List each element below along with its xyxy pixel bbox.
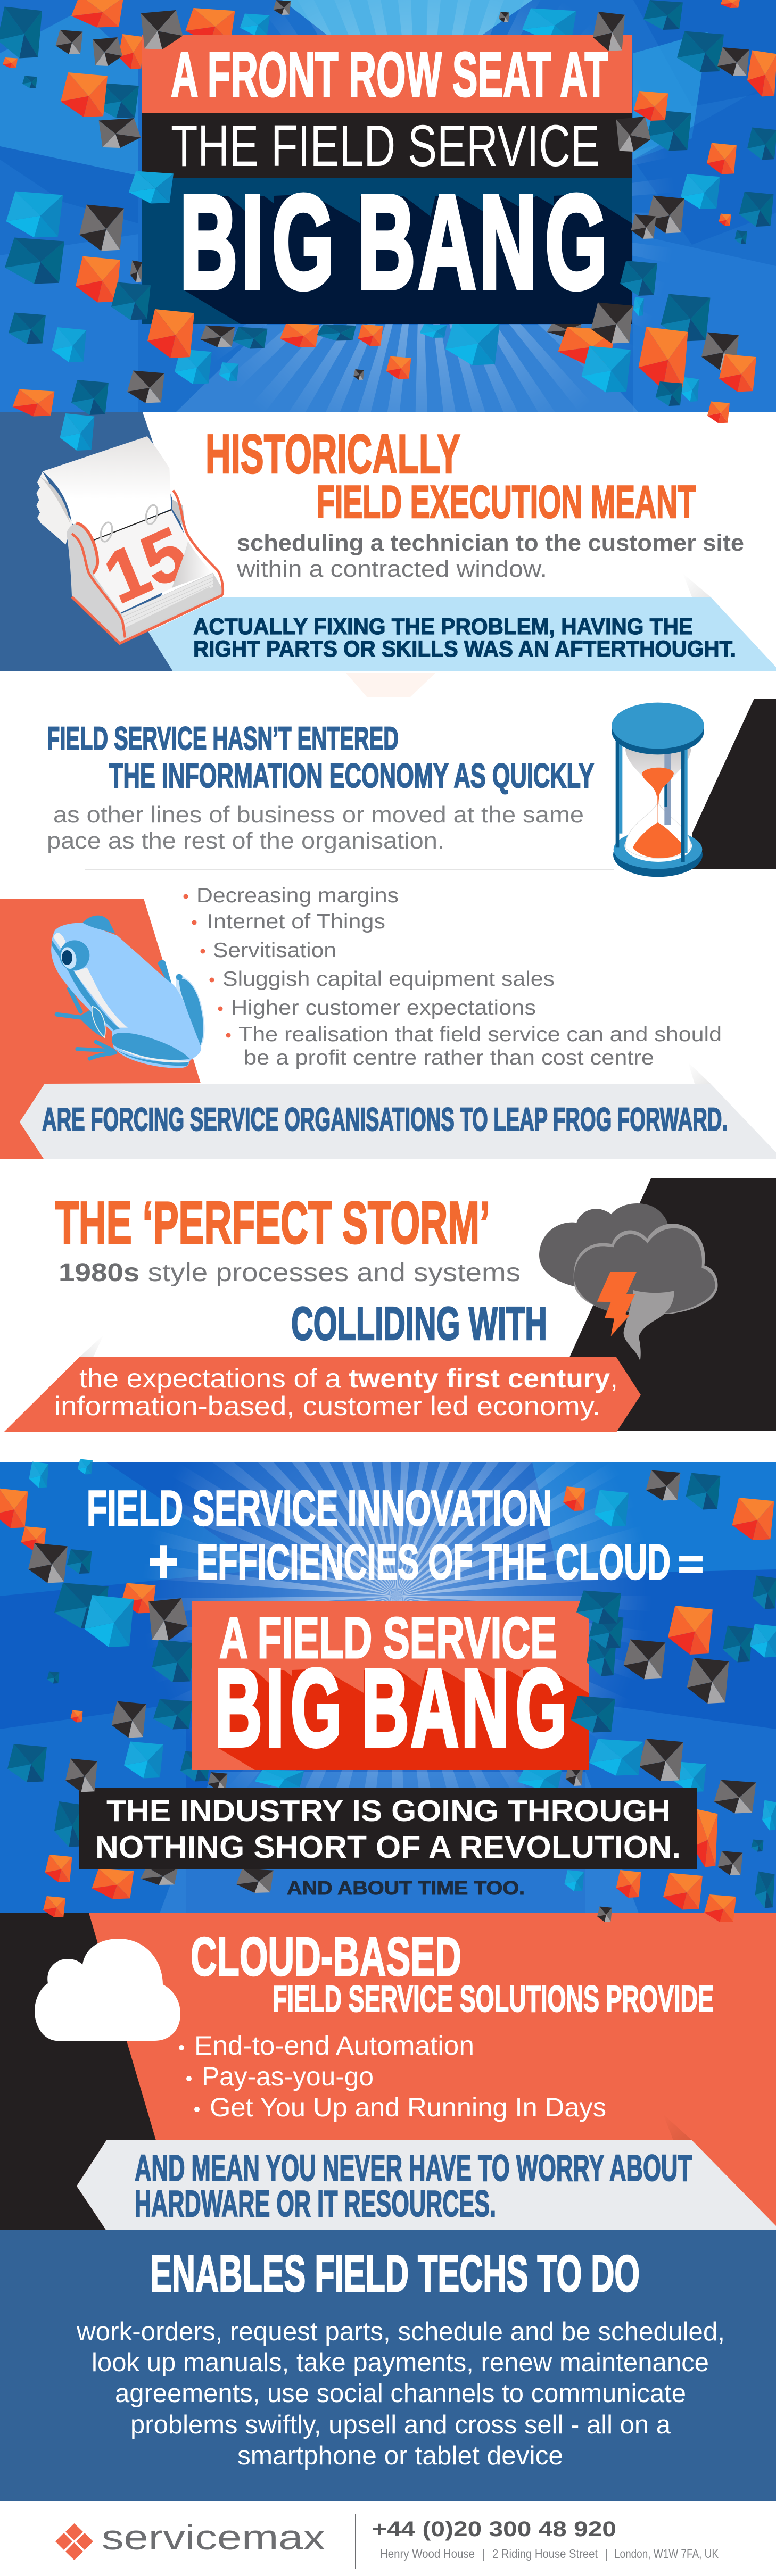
blue burst background	[0, 1462, 776, 1913]
text: expectations of a twenty first century: the expectations of a twenty first century ,	[79, 1364, 618, 1393]
text: actually fixing the problem	[193, 614, 736, 662]
text: as other lines of business	[47, 802, 584, 854]
heading: historically: HISTORICALLY	[205, 423, 460, 485]
paragraph: what techs can do: agreements, use social channels to communicate	[115, 2379, 686, 2408]
bullet list of pressures: Internet of Things	[207, 910, 385, 933]
icon: hourglass	[612, 703, 704, 877]
heading: colliding with: COLLIDING WITH	[291, 1297, 547, 1350]
paragraph: what techs can do: smartphone or tablet device	[237, 2441, 563, 2470]
heading: field service hasn't entered: FIELD SERVICE HASN’T ENTERED	[47, 720, 399, 757]
text: 1980s style processes: 1980s style processes and systems	[59, 1259, 521, 1287]
gems behind title box	[0, 0, 776, 451]
panel: information economy	[47, 673, 776, 877]
gems in front of title box	[111, 10, 684, 358]
paragraph: what techs can do: problems swiftly, upsell and cross sell - all on a	[130, 2411, 671, 2439]
address: 2 Riding House Street	[492, 2547, 598, 2561]
title line 2: THE FIELD SERVICE	[171, 113, 600, 179]
title line 1	[142, 35, 632, 113]
paragraph: what techs can do: look up manuals, take payments, renew maintenance	[92, 2348, 709, 2377]
text: as other lines of business: pace as the rest of the organisation.	[47, 828, 444, 854]
panel: field service innovation big bang	[0, 1459, 776, 1922]
panel: cloud-based solutions	[0, 1913, 776, 2231]
bullet list of pressures	[183, 884, 722, 1069]
heading: plus efficiencies of the cloud equals: +	[148, 1527, 178, 1596]
header background with burst	[0, 0, 776, 412]
text: scheduling a technician: scheduling a technician to the customer site	[237, 530, 744, 556]
orange box: a field service big bang	[192, 1601, 589, 1770]
bullet list of benefits: End-to-end Automation	[194, 2031, 474, 2060]
heading: the perfect storm: THE ‘PERFECT STORM’	[55, 1190, 490, 1256]
light grey band	[77, 2140, 776, 2231]
light blue band	[148, 597, 776, 671]
orange box: a field service big bang: BIG BANG	[214, 1646, 567, 1769]
panel: leap frog	[0, 884, 776, 1159]
black box: the industry is going through a revolution	[79, 1788, 697, 1869]
address: |	[482, 2547, 485, 2561]
heading: field service innovation: FIELD SERVICE INNOVATION	[87, 1480, 552, 1536]
bullet list of pressures: Higher customer expectations	[231, 996, 536, 1019]
scattered gems	[0, 1459, 776, 1922]
text: actually fixing the problem: ACTUALLY FIXING THE PROBLEM, HAVING THE	[193, 614, 693, 639]
paragraph: what techs can do: work-orders, request parts, schedule and be scheduled,	[76, 2317, 725, 2346]
panel: historically field execution	[0, 412, 776, 671]
gem over black box	[65, 1759, 97, 1792]
address: London, W1W 7FA, UK	[614, 2547, 719, 2561]
text: expectations of a twenty first century	[54, 1364, 618, 1421]
bullet list of pressures: Decreasing margins	[196, 884, 399, 907]
icon: storm cloud with lightning	[539, 1203, 718, 1361]
paragraph: what techs can do	[76, 2317, 725, 2470]
icon: calendar showing 15: 15	[93, 511, 198, 619]
bullet list of pressures: be a profit centre rather than cost centre	[244, 1046, 654, 1069]
text: actually fixing the problem: RIGHT PARTS OR SKILLS WAS AN AFTERTHOUGHT.	[193, 636, 736, 662]
text: and about time too: AND ABOUT TIME TOO.	[287, 1877, 525, 1899]
black box: the industry is going through a revolution: THE INDUSTRY IS GOING THROUGH	[106, 1794, 671, 1828]
icon: servicemax logo diamonds	[55, 2523, 93, 2560]
phone number: +44 (0)20 300 48 920	[372, 2517, 616, 2541]
bullet list of benefits: Get You Up and Running In Days	[210, 2092, 606, 2122]
logo wordmark: servicemax	[102, 2517, 325, 2557]
text: as other lines of business: as other lines of business or moved at the same	[53, 802, 584, 828]
heading: plus efficiencies of the cloud equals: =	[678, 1540, 704, 1587]
bullet list of pressures: The realisation that field service can and should	[238, 1023, 722, 1046]
bullet list of pressures: Sluggish capital equipment sales	[222, 968, 555, 991]
panel: enables field techs	[0, 2230, 776, 2501]
light grey band	[20, 1084, 776, 1159]
bullet list of benefits: Pay-as-you-go	[202, 2062, 374, 2091]
icon: frog	[51, 916, 204, 1068]
text: and mean you never have to worry: HARDWARE OR IT RESOURCES.	[135, 2183, 496, 2224]
orange box: a field service big bang: A FIELD SERVICE	[219, 1606, 557, 1671]
title line 3 big bang: BIG BANG	[180, 167, 607, 316]
heading: cloud-based: CLOUD-BASED	[191, 1926, 461, 1987]
footer	[0, 2501, 776, 2576]
title box	[142, 35, 632, 324]
text: expectations of a twenty first century: information-based, customer led economy.	[54, 1391, 600, 1421]
panel: title header	[0, 0, 776, 479]
black box: the industry is going through a revolution: NOTHING SHORT OF A REVOLUTION.	[95, 1830, 681, 1865]
icon: calendar showing 15	[36, 436, 224, 644]
address: Henry Wood House	[380, 2547, 475, 2561]
orange arrow banner	[4, 1357, 641, 1432]
bullet list of pressures: Servitisation	[213, 939, 336, 962]
gems in front of orange box	[571, 1591, 643, 1776]
heading: plus efficiencies of the cloud equals	[148, 1527, 704, 1596]
text: and mean you never have to worry	[135, 2147, 692, 2224]
bullet list of benefits	[179, 2031, 606, 2122]
address	[380, 2547, 719, 2561]
text: within a contracted window: within a contracted window.	[236, 556, 547, 582]
panel: perfect storm	[4, 1178, 776, 1432]
address: |	[605, 2547, 608, 2561]
icon: white cloud	[35, 1939, 180, 2041]
